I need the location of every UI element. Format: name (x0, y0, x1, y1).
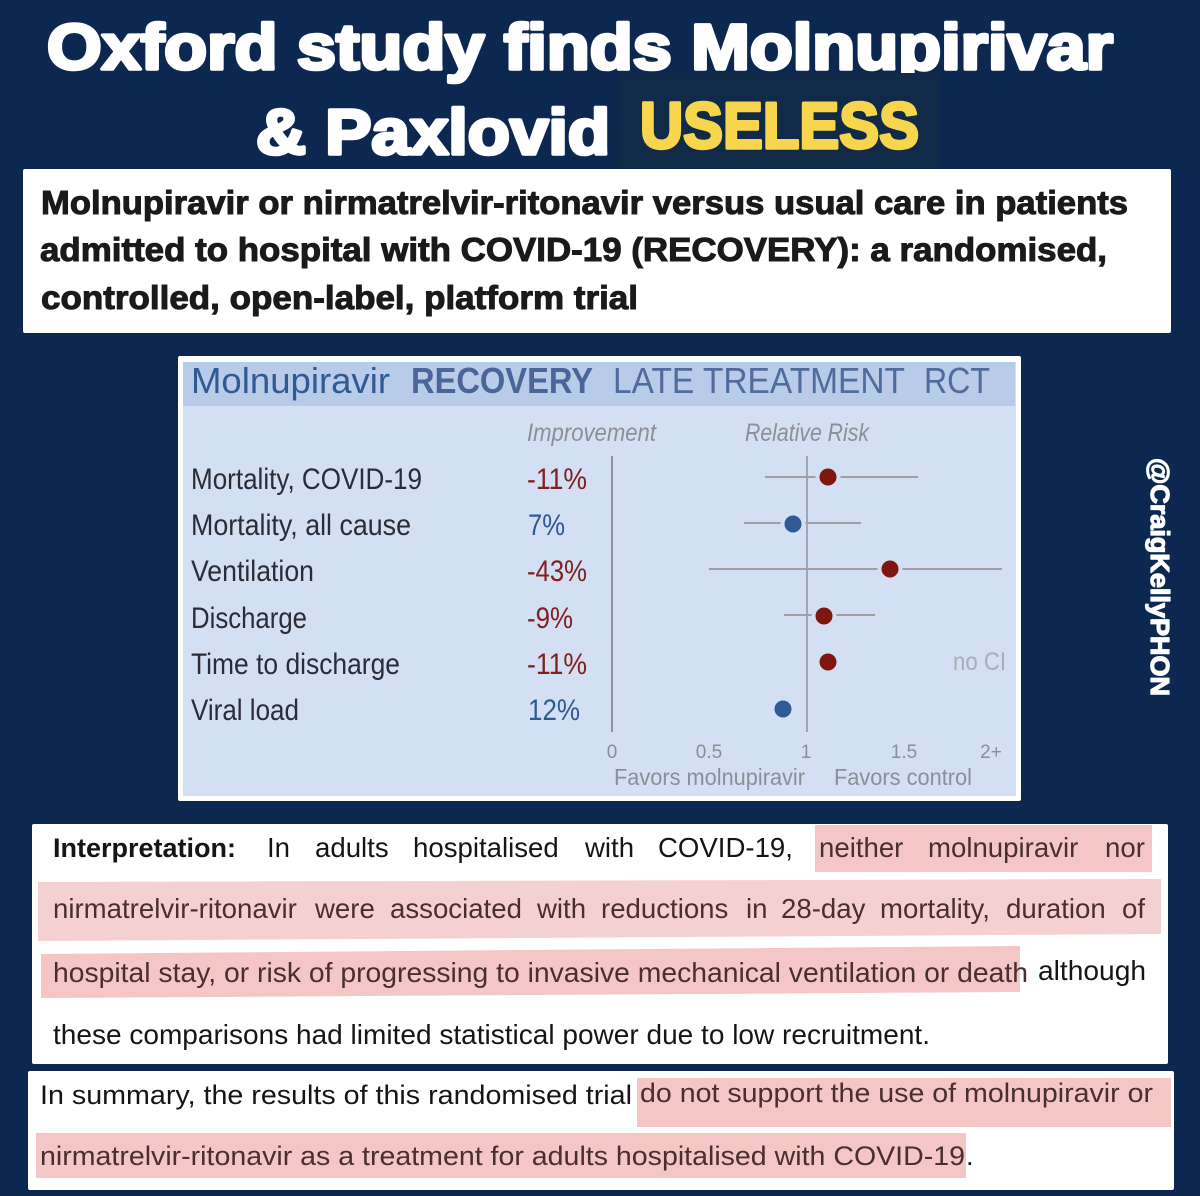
chart header: RECOVERY (411, 360, 593, 401)
outcome labels: Mortality, COVID-19 (191, 463, 422, 496)
panel: study title (23, 169, 1171, 333)
interpretation text: 28-day (781, 893, 866, 924)
improvement values: 7% (528, 509, 565, 542)
interpretation text: duration (1006, 893, 1106, 924)
axis tick labels: 1 (801, 742, 811, 763)
interpretation text: COVID-19, (658, 832, 793, 863)
interpretation text: of (1122, 893, 1145, 924)
interpretation text: although (1038, 955, 1146, 986)
interpretation text: neither (819, 832, 903, 863)
outcome labels: Mortality, all cause (191, 509, 411, 542)
summary text: nirmatrelvir-ritonavir as a treatment for adults hospitalised with COVID-19 (40, 1141, 965, 1171)
chart header: RCT (924, 360, 990, 401)
interpretation text: Interpretation: (53, 833, 236, 863)
interpretation text: with (536, 893, 586, 924)
interpretation text: were (314, 893, 375, 924)
interpretation text: hospital stay, or risk of progressing to invasive mechanical ventilation or death (53, 957, 1028, 988)
column headings: Improvement (527, 419, 657, 447)
axis direction labels: Favors molnupiravir (614, 764, 805, 790)
improvement values: -11% (527, 463, 587, 496)
interpretation text: In (267, 832, 290, 863)
outcome labels (191, 463, 422, 727)
relative risk plot (612, 456, 1006, 732)
outcome labels: Viral load (191, 694, 299, 727)
interpretation text: nor (1105, 832, 1145, 863)
interpretation text: adults (315, 832, 389, 863)
outcome labels: Time to discharge (191, 648, 400, 681)
panel: forest plot (178, 356, 1021, 801)
axis tick labels: 1.5 (891, 742, 917, 763)
interpretation text: with (584, 832, 634, 863)
panel: study title: Molnupiravir or nirmatrelvir-ritonavir versus usual care in patients (41, 184, 1128, 221)
chart header: LATE TREATMENT (613, 360, 905, 401)
title (47, 11, 1113, 168)
axis tick labels (607, 742, 1002, 763)
chart header: Molnupiravir (191, 360, 390, 401)
outcome labels: Ventilation (191, 555, 314, 588)
interpretation text: associated (390, 893, 522, 924)
interpretation text: in (746, 893, 767, 924)
vertical handle: @CraigKellyPHON (1145, 458, 1175, 696)
improvement values: 12% (528, 694, 580, 727)
summary text: In summary, the results of this randomised trial (40, 1080, 632, 1110)
chart header (183, 360, 1015, 406)
summary text: . (966, 1141, 974, 1171)
summary text (40, 1078, 1153, 1171)
axis direction labels: Favors control (834, 764, 972, 790)
summary text: do not support the use of molnupiravir or (640, 1078, 1153, 1108)
interpretation text: nirmatrelvir-ritonavir (53, 893, 297, 924)
axis tick labels: 2+ (980, 742, 1002, 763)
column headings: Relative Risk (745, 419, 870, 447)
panel: study title: admitted to hospital with COVID-19 (RECOVERY): a randomised, (40, 231, 1107, 268)
improvement values: -9% (527, 602, 573, 635)
interpretation text: molnupiravir (928, 832, 1078, 863)
highlights (36, 1078, 1171, 1178)
relative risk plot: no CI (953, 648, 1006, 676)
outcome labels: Discharge (191, 602, 307, 635)
highlights (38, 825, 1161, 998)
axis tick labels: 0.5 (696, 742, 722, 763)
column headings (527, 419, 870, 447)
interpretation text: reductions (601, 893, 728, 924)
axis tick labels: 0 (607, 742, 617, 763)
axis direction labels (614, 764, 972, 790)
interpretation text: these comparisons had limited statistical power due to low recruitment. (53, 1019, 930, 1050)
highlighted word: USELESS: USELESS (640, 89, 919, 162)
panel: study title: controlled, open-label, platform trial (41, 279, 638, 316)
panel: interpretation (32, 824, 1168, 1064)
interpretation text: mortality, (880, 893, 990, 924)
title: & Paxlovid (256, 96, 610, 168)
title: Oxford study finds Molnupirivar (47, 11, 1113, 83)
interpretation text (53, 832, 1146, 1050)
panel: summary (28, 1071, 1174, 1190)
improvement values (527, 463, 587, 727)
improvement values: -11% (527, 648, 587, 681)
improvement values: -43% (527, 555, 587, 588)
interpretation text: hospitalised (413, 832, 559, 863)
